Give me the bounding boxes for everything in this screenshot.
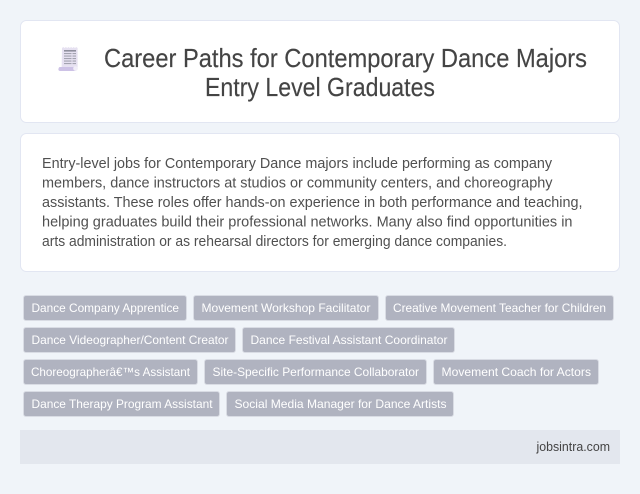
text block: description: assistants. These roles offer hands-on experience in both performance and teaching, [42,194,582,211]
tag [204,360,426,384]
heading: Entry Level Graduates [205,74,435,102]
tag: Movement Workshop Facilitator [202,301,370,315]
footer [20,430,620,464]
tag [24,392,220,416]
tag: Dance Company Apprentice [32,301,179,315]
heading [104,45,587,102]
text block: description: helping graduates build their professional networks. Many also find opportunities in [42,214,572,230]
panel: title [20,20,620,122]
text block: description: arts administration or as rehearsal directors for emerging dance companies. [42,233,507,250]
tag: Movement Coach for Actors [442,365,591,379]
tag [24,328,236,352]
tag [386,296,614,320]
tag: Dance Videographer/Content Creator [32,333,228,347]
text block: description [42,155,582,250]
text block: description: members, dance instructors at studios or community centers, and choreography [42,174,553,192]
tag: Dance Therapy Program Assistant [32,397,213,411]
tags: job titles [24,296,614,416]
tag: Choreographerâ€™s Assistant [31,365,191,379]
footer: jobsintra.com [536,439,610,454]
tag [24,296,186,320]
icon: paper scroll [58,47,78,71]
tag [226,392,454,416]
tag [434,360,598,384]
tag [242,328,454,352]
panel: description [20,134,620,272]
heading: Career Paths for Contemporary Dance Majors [104,45,587,73]
tag: Creative Movement Teacher for Children [393,301,606,315]
text block: description: Entry-level jobs for Contemporary Dance majors include performing as company [42,155,552,172]
tag: Dance Festival Assistant Coordinator [250,333,448,347]
tag: Site-Specific Performance Collaborator [212,365,419,379]
tag: Social Media Manager for Dance Artists [234,397,446,411]
tag [24,360,198,384]
tag [194,296,378,320]
